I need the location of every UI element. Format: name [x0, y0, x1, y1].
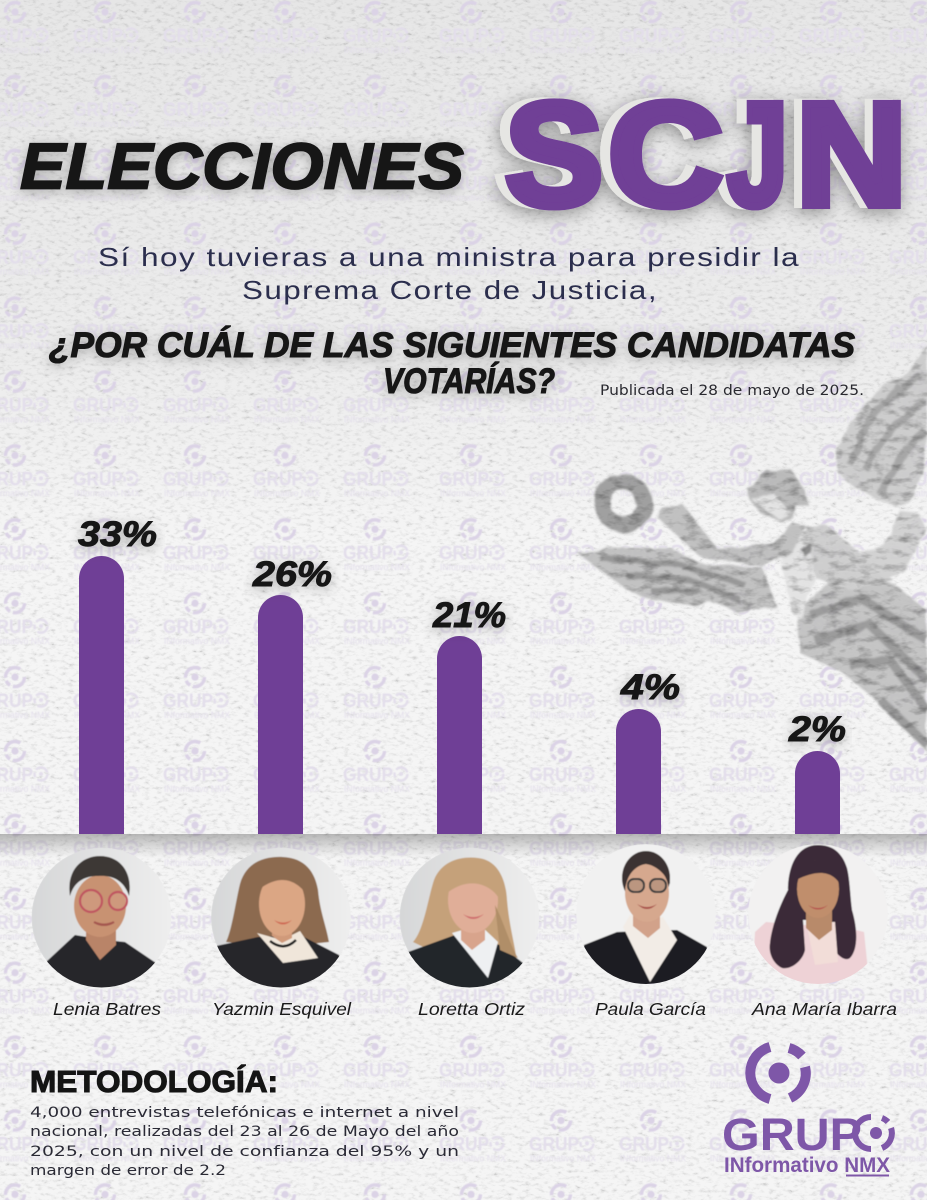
- portrait: Yazmin Esquivel: [210, 848, 351, 990]
- publication date: Publicada el 28 de mayo de 2025.: [600, 383, 864, 399]
- question heading: ¿POR CUÁL DE LAS SIGUIENTES CANDIDATAS: [49, 326, 855, 365]
- title: SCJN: S: [505, 73, 603, 237]
- question heading: VOTARÍAS?: [383, 362, 555, 401]
- methodology text: 4,000 entrevistas telefónicas e internet a nivel: [30, 1105, 459, 1121]
- title: SCJN: J: [727, 73, 788, 237]
- question heading: [49, 326, 855, 401]
- logo: Grupo Informativo NMX: [722, 1047, 892, 1177]
- bar: Ana María Ibarra 2%: [788, 710, 846, 834]
- bar: Loretta Ortiz 21%: [432, 596, 506, 834]
- candidate names: Lenia Batres: [53, 999, 161, 1019]
- methodology text: [30, 1105, 459, 1179]
- image: angel statue: [577, 345, 927, 752]
- title: SCJN: S: [495, 72, 593, 236]
- bar: Loretta Ortiz 21%: 21%: [432, 596, 506, 635]
- icon: logo mark: [750, 1047, 806, 1099]
- title: SCJN: J: [717, 72, 778, 236]
- title: SCJN: C: [598, 72, 713, 236]
- bar chart: [78, 515, 846, 834]
- subtitle: Sí hoy tuvieras a una ministra para presidir la: [98, 242, 800, 272]
- title: SCJN: N: [788, 72, 899, 236]
- portrait: Paula García: [576, 844, 716, 990]
- title: SCJN: N: [796, 73, 907, 237]
- bar: Ana María Ibarra 2%: 2%: [788, 710, 846, 749]
- bar: Yazmin Esquivel 26%: 26%: [252, 555, 332, 594]
- methodology heading: METODOLOGÍA:: [30, 1064, 278, 1099]
- bar: Yazmin Esquivel 26%: [252, 555, 332, 834]
- bar: Lenia Batres 33%: [78, 515, 157, 834]
- candidate names: Ana María Ibarra: [751, 999, 897, 1019]
- logo: Grupo Informativo NMX: GRUP: [722, 1109, 862, 1160]
- methodology text: margen de error de 2.2: [30, 1163, 226, 1179]
- candidate names: Yazmin Esquivel: [212, 999, 352, 1019]
- candidate names: Loretta Ortiz: [418, 999, 525, 1019]
- title: ELECCIONES: ELECCIONES: [20, 130, 464, 202]
- subtitle: [98, 242, 800, 305]
- candidate names: Paula García: [595, 999, 706, 1019]
- candidate names: [53, 999, 897, 1019]
- title: SCJN: C: [608, 73, 723, 237]
- portrait: Lenia Batres: [32, 848, 172, 990]
- subtitle: Suprema Corte de Justicia,: [242, 275, 658, 305]
- band shadow under bars: [0, 834, 927, 858]
- methodology text: 2025, con un nivel de confianza del 95% y un: [30, 1144, 459, 1160]
- portrait: Loretta Ortiz: [400, 848, 540, 990]
- bar: Paula García 4%: [616, 668, 680, 834]
- portrait: Ana María Ibarra: [748, 844, 888, 990]
- methodology text: nacional, realizadas del 23 al 26 de Mayo del año: [30, 1124, 459, 1140]
- icon: small logo mark: [855, 1117, 892, 1149]
- bar: Lenia Batres 33%: 33%: [78, 515, 157, 554]
- bar: Paula García 4%: 4%: [620, 668, 680, 707]
- title: SCJN: [495, 72, 907, 237]
- logo: Grupo Informativo NMX: INformativo NMX: [724, 1154, 890, 1177]
